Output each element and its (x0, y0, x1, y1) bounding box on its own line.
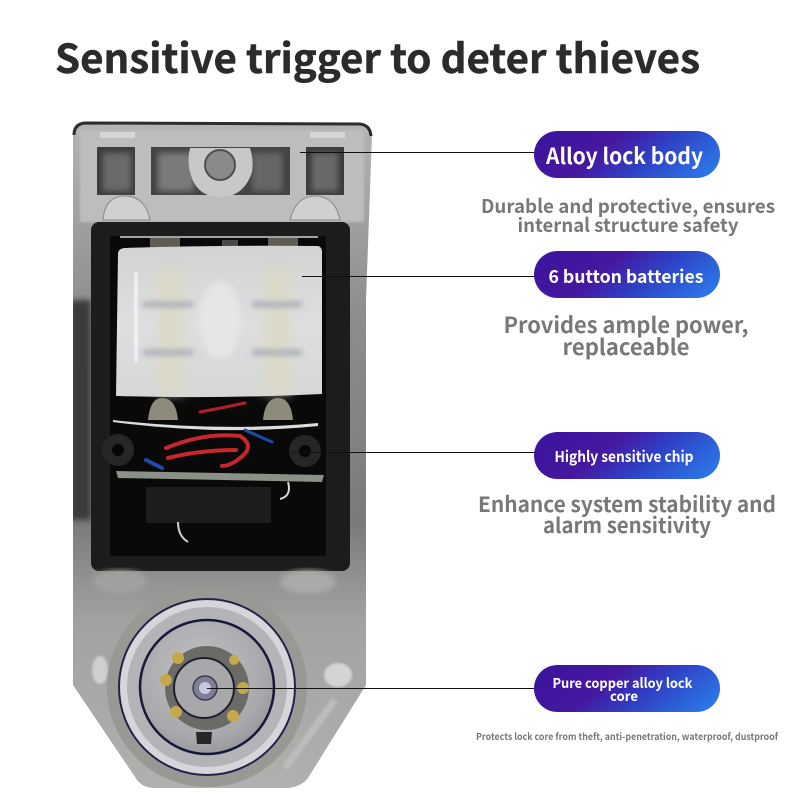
lower battery ends (113, 398, 318, 430)
circuit board (116, 471, 324, 482)
left shadow strip (73, 296, 91, 524)
casing top edge (74, 123, 371, 136)
leader line: lock core (207, 688, 536, 690)
description: lock core: Protects lock core from theft, anti-penetration, waterproof, dustproof (476, 729, 778, 743)
sensor component (146, 482, 289, 542)
battery tops (120, 237, 318, 248)
title: Sensitive trigger to deter thieves (55, 27, 700, 85)
lock cylinder (107, 587, 307, 787)
leader line: alloy lock body (300, 152, 536, 154)
coloured wires (146, 403, 272, 468)
screw posts (102, 434, 321, 467)
inner cavity (110, 236, 326, 556)
label: alloy lock body (534, 131, 720, 178)
description: alloy lock body: internal structure safety (518, 211, 739, 238)
label: button batteries: 6 button batteries (548, 263, 704, 289)
label: chip (534, 432, 720, 479)
leader line: chip (292, 452, 536, 454)
label: lock core: Pure copper alloy lock (552, 672, 693, 692)
black housing frame (91, 222, 350, 571)
label: button batteries (534, 251, 720, 298)
label: alloy lock body: Alloy lock body (545, 139, 703, 171)
description: chip: Enhance system stability and (478, 489, 776, 519)
brass pins (160, 652, 249, 722)
description: chip (478, 489, 776, 540)
label: lock core (534, 665, 720, 712)
lock body casing (73, 122, 372, 788)
description: button batteries: Provides ample power, (504, 308, 748, 340)
description: alloy lock body: Durable and protective, ensures (481, 192, 775, 219)
label: lock core: core (610, 685, 638, 705)
description: button batteries (504, 308, 748, 362)
description: button batteries: replaceable (562, 330, 690, 362)
casting details (92, 570, 352, 768)
description: alloy lock body (481, 192, 775, 238)
label: chip: Highly sensitive chip (554, 446, 694, 467)
product photo: alarm lock (70, 122, 372, 788)
description: chip: alarm sensitivity (543, 510, 711, 540)
translucent battery cover (116, 246, 322, 397)
leader line: button batteries (302, 276, 536, 278)
top mounting bracket (80, 130, 364, 222)
